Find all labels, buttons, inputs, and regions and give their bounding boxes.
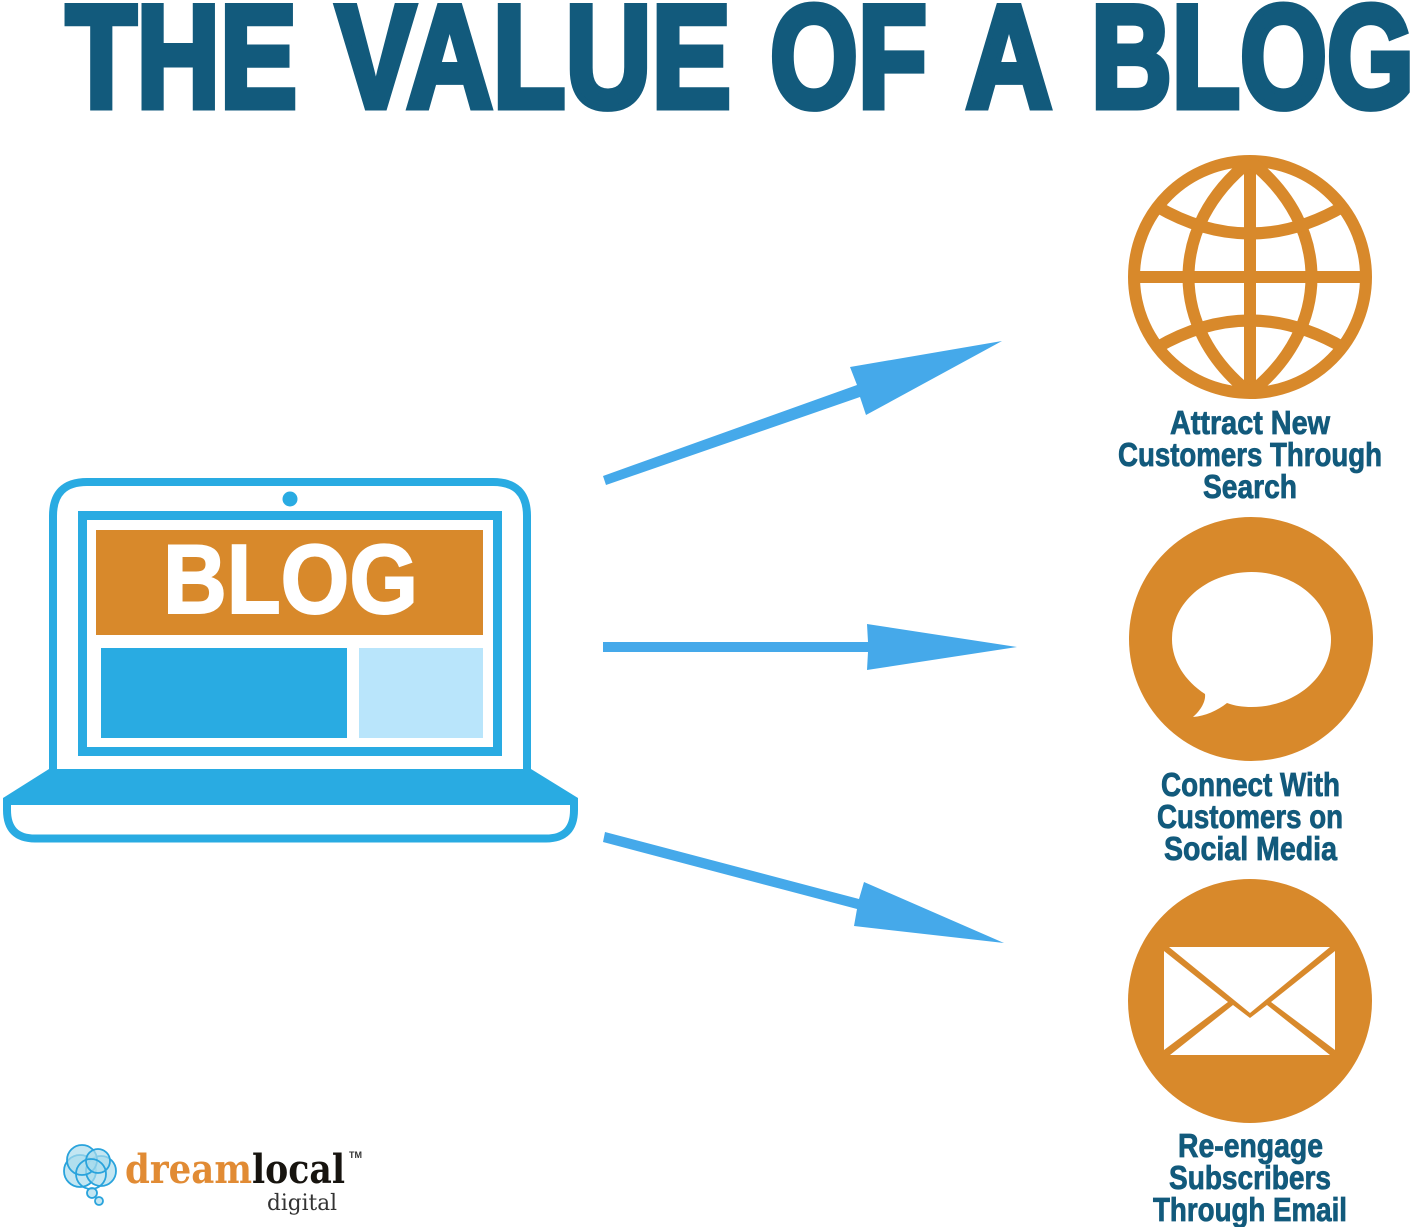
caption: email: Through Email (1153, 1191, 1347, 1227)
icon: globe (1134, 161, 1366, 393)
icon: laptop with blog page (3, 482, 578, 838)
sidebar block (359, 648, 483, 738)
caption: search: Attract New (1170, 404, 1330, 441)
laptop lid (53, 482, 527, 775)
arrow: to email (603, 832, 1004, 943)
icon: envelope (1128, 879, 1372, 1123)
caption: social media (1157, 766, 1343, 867)
caption: social media: Social Media (1164, 830, 1338, 867)
screen frame (82, 516, 498, 752)
main content block (101, 648, 347, 738)
caption: email: Subscribers (1169, 1159, 1331, 1196)
keyboard deck (3, 769, 578, 805)
logo: dreamlocal digital: local (252, 1146, 345, 1193)
caption: search (1118, 404, 1382, 505)
arrow: to social media (603, 624, 1017, 670)
laptop base (7, 802, 574, 838)
blog banner: BLOG (163, 524, 418, 634)
caption: social media: Customers on (1157, 798, 1343, 835)
logo: dreamlocal digital: TM (349, 1150, 362, 1160)
caption: email (1153, 1127, 1347, 1227)
logo: dreamlocal digital (64, 1145, 362, 1216)
title (66, 0, 1410, 138)
logo: dreamlocal digital: digital (267, 1191, 337, 1216)
webcam (282, 492, 298, 506)
arrow: to search (603, 341, 1002, 485)
wordmark: dream (125, 1146, 252, 1193)
icon: speech bubble (1129, 517, 1373, 761)
caption: email: Re-engage (1178, 1127, 1323, 1164)
caption: search: Search (1203, 468, 1297, 505)
icon: thought cloud (64, 1145, 116, 1205)
caption: social media: Connect With (1161, 766, 1340, 803)
